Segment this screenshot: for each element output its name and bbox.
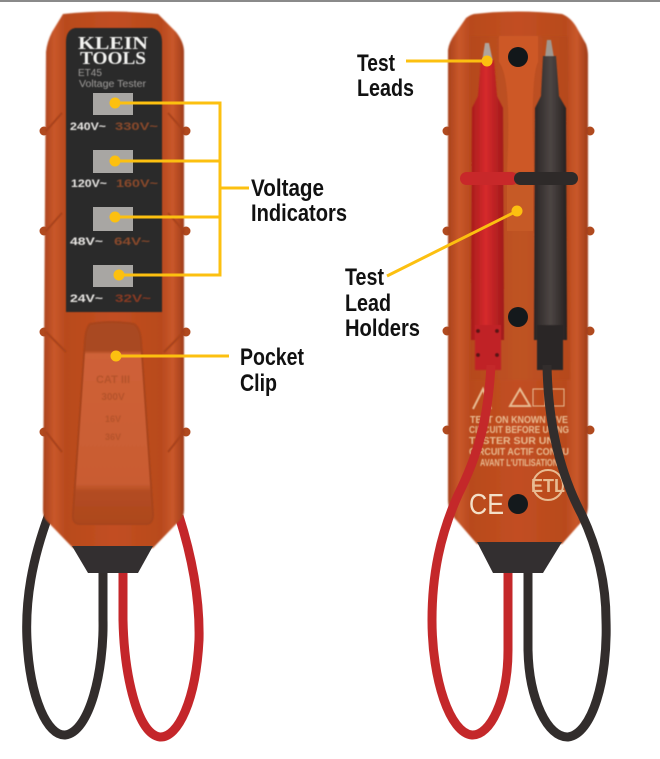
label: Lead	[345, 290, 391, 317]
label: Pocket	[240, 344, 304, 371]
clip engraving	[96, 374, 130, 442]
top screw	[508, 47, 528, 67]
side nubs	[442, 126, 594, 434]
clip engraving: 16V	[105, 414, 121, 424]
leader	[406, 60, 487, 62]
safety markings: CIRCUIT ACTIF CONNU	[469, 447, 569, 458]
CE mark: CE	[469, 489, 504, 521]
model text: ET45	[78, 68, 102, 79]
safety markings	[469, 389, 569, 469]
callout: voltage indicators	[110, 98, 347, 280]
voltage ratings	[70, 121, 159, 305]
voltage ratings: 160V~	[116, 178, 159, 190]
black connector collar	[477, 542, 562, 573]
voltage ratings: 330V~	[115, 121, 159, 133]
red lead wire	[432, 365, 508, 735]
model text	[78, 68, 147, 90]
top rule	[0, 0, 660, 2]
callout: test lead holders	[345, 206, 522, 342]
side nubs	[40, 126, 190, 436]
black connector collar	[72, 546, 153, 573]
leader	[116, 354, 229, 358]
middle screw	[508, 307, 528, 327]
tester body	[448, 12, 588, 544]
brand logo: TOOLS	[80, 48, 146, 68]
voltage ratings: 240V~	[70, 121, 107, 133]
red wire loop	[123, 516, 199, 737]
tester body	[43, 12, 184, 548]
label: Holders	[345, 315, 420, 342]
indicator windows	[93, 93, 133, 287]
safety markings: TEST ON KNOWN LIVE	[470, 415, 568, 426]
label: Test	[345, 264, 384, 291]
label: Indicators	[251, 200, 347, 227]
body rib chevrons	[46, 113, 184, 452]
black wire loop	[27, 514, 103, 735]
label: Leads	[357, 75, 414, 102]
screw post	[499, 36, 538, 172]
safety markings: TESTER SUR UN	[469, 436, 554, 447]
voltage ratings: 32V~	[115, 293, 152, 305]
pocket clip	[73, 322, 153, 524]
leader dot	[512, 206, 522, 216]
callout: pocket clip	[110, 344, 304, 397]
model text: Voltage Tester	[79, 79, 147, 90]
recessed channel	[470, 36, 570, 380]
label: Voltage	[251, 175, 324, 202]
bottom screw	[508, 494, 528, 514]
right tester, back view	[432, 12, 606, 737]
black display panel	[66, 28, 162, 312]
ETL mark: ETL	[531, 476, 565, 496]
brand logo: KLEIN	[78, 33, 148, 53]
voltage ratings: 64V~	[114, 236, 151, 248]
lead holder	[507, 185, 533, 231]
clip engraving: 36V	[105, 432, 121, 442]
callout: test leads	[357, 50, 492, 102]
voltage ratings: 24V~	[70, 293, 104, 305]
black lead wire	[528, 365, 606, 737]
leader dots	[110, 98, 124, 280]
black test lead	[534, 40, 567, 370]
clip engraving: 300V	[101, 392, 125, 403]
leader dot	[482, 56, 492, 66]
label: Clip	[240, 370, 277, 397]
leader dot	[110, 350, 122, 362]
clip engraving: CAT III	[96, 374, 130, 386]
voltage ratings: 48V~	[70, 236, 104, 248]
brand logo	[78, 33, 148, 68]
lead collars	[460, 172, 518, 185]
red test lead	[471, 43, 504, 370]
label: Test	[357, 50, 395, 77]
leader lines	[115, 102, 249, 276]
voltage ratings: 120V~	[71, 178, 108, 190]
safety markings: AVANT L'UTILISATION	[480, 458, 558, 469]
ETL mark	[531, 470, 565, 500]
leader	[387, 211, 517, 276]
safety markings: CIRCUIT BEFORE USING	[469, 425, 569, 436]
left tester, front view	[27, 12, 199, 737]
